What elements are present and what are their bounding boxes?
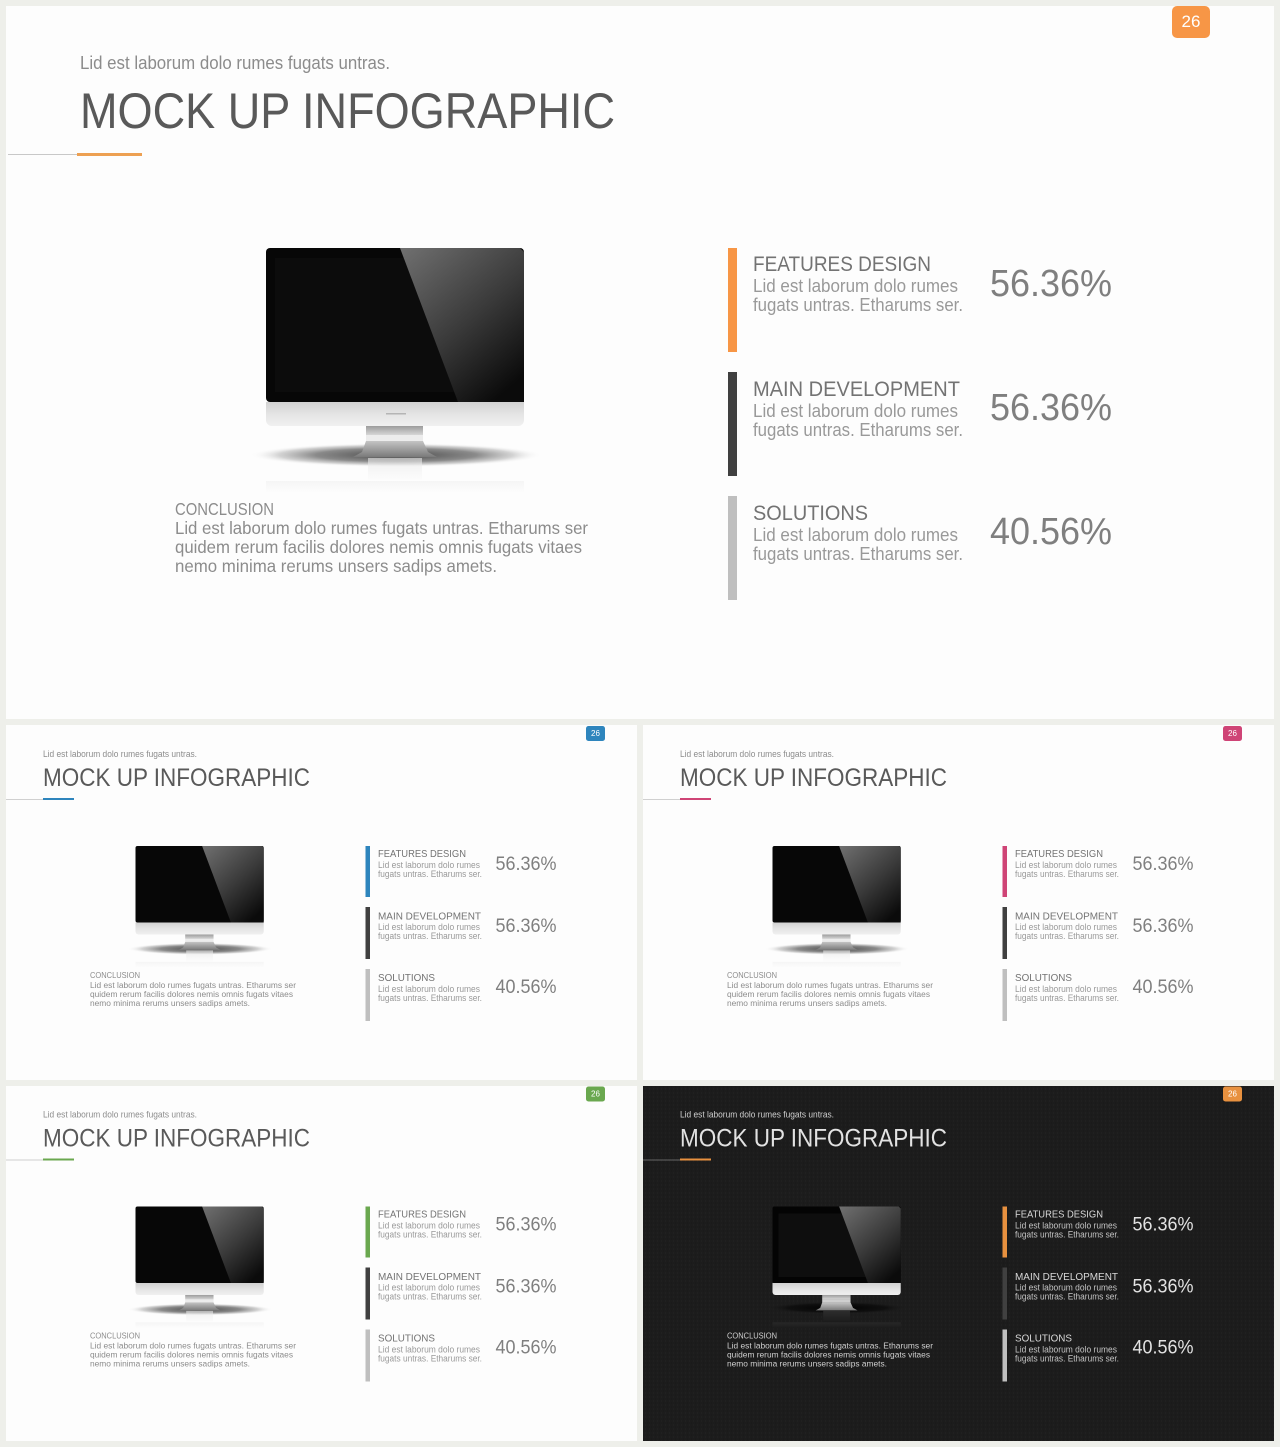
- title: MOCK UP INFOGRAPHIC: [680, 764, 947, 792]
- stat: solutions: SOLUTIONS: [753, 502, 868, 525]
- title underline: [6, 1158, 74, 1160]
- stat: main development: [366, 1268, 557, 1320]
- stat: solutions: [1002, 969, 1194, 1021]
- stat: solutions: Lid est laborum dolo rumes: [1015, 984, 1117, 994]
- stat: solutions: SOLUTIONS: [378, 1332, 435, 1344]
- stat: solutions: fugats untras. Etharums ser.: [753, 544, 963, 564]
- conclusion text block: nemo minima rerums unsers sadips amets.: [90, 1358, 250, 1368]
- stat: solutions: [366, 969, 557, 1021]
- stat: features design: FEATURES DESIGN: [1015, 848, 1103, 860]
- conclusion text block: nemo minima rerums unsers sadips amets.: [175, 556, 497, 576]
- title: MOCK UP INFOGRAPHIC: [80, 83, 615, 139]
- conclusion text block: quidem rerum facilis dolores nemis omnis fugats vitaes: [727, 1350, 931, 1360]
- subtitle: Lid est laborum dolo rumes fugats untras.: [43, 1110, 197, 1120]
- stat: features design: 56.36%: [496, 854, 557, 875]
- stat: main development: [728, 372, 1112, 476]
- stat: solutions: [1002, 1330, 1194, 1382]
- stat: features design: Lid est laborum dolo rumes: [1015, 860, 1117, 870]
- conclusion text block: [727, 970, 933, 1008]
- stat: features design: 56.36%: [1132, 854, 1194, 875]
- conclusion text block: CONCLUSION: [90, 1330, 140, 1340]
- stat: main development: MAIN DEVELOPMENT: [378, 1271, 482, 1283]
- stat: main development: 56.36%: [496, 1276, 557, 1298]
- stat: features design: 56.36%: [990, 263, 1112, 305]
- stat: features design: [1002, 846, 1194, 897]
- stat: solutions: Lid est laborum dolo rumes: [1015, 1344, 1117, 1354]
- stat: main development: 56.36%: [1132, 1276, 1194, 1298]
- conclusion text block: CONCLUSION: [175, 499, 274, 519]
- conclusion text block: nemo minima rerums unsers sadips amets.: [727, 998, 887, 1008]
- stat: main development: Lid est laborum dolo rumes: [1015, 922, 1117, 932]
- panel: small slide pink: [643, 725, 1274, 1080]
- subtitle: Lid est laborum dolo rumes fugats untras.: [80, 53, 390, 73]
- stat: features design: 56.36%: [1132, 1214, 1194, 1236]
- stat: main development: 56.36%: [496, 916, 557, 937]
- stat: solutions: fugats untras. Etharums ser.: [1015, 1354, 1119, 1364]
- icon: desktop monitor: [128, 846, 273, 967]
- stat: features design: FEATURES DESIGN: [378, 1208, 466, 1220]
- stat: features design: Lid est laborum dolo rumes: [1015, 1220, 1117, 1230]
- page badge: [586, 1086, 605, 1102]
- stat: features design: fugats untras. Etharums ser.: [378, 869, 482, 879]
- conclusion text block: [727, 1330, 933, 1368]
- stat: main development: Lid est laborum dolo rumes: [753, 401, 958, 421]
- stat: solutions: fugats untras. Etharums ser.: [378, 993, 482, 1003]
- stat: solutions: fugats untras. Etharums ser.: [1015, 993, 1119, 1003]
- conclusion text block: Lid est laborum dolo rumes fugats untras. Etharums ser: [90, 1340, 296, 1350]
- stat: main development: Lid est laborum dolo rumes: [378, 1282, 480, 1292]
- stat: main development: fugats untras. Etharums ser.: [1015, 931, 1119, 941]
- conclusion text block: quidem rerum facilis dolores nemis omnis fugats vitaes: [727, 989, 931, 999]
- conclusion text block: Lid est laborum dolo rumes fugats untras. Etharums ser: [175, 518, 588, 538]
- conclusion text block: Lid est laborum dolo rumes fugats untras. Etharums ser: [727, 1340, 933, 1350]
- stat: features design: FEATURES DESIGN: [1015, 1208, 1103, 1220]
- stat: main development: fugats untras. Etharums ser.: [378, 1292, 482, 1302]
- stat: solutions: SOLUTIONS: [1015, 972, 1072, 984]
- conclusion text block: CONCLUSION: [727, 1330, 777, 1340]
- stat: features design: Lid est laborum dolo rumes: [378, 1220, 480, 1230]
- conclusion text block: CONCLUSION: [90, 970, 140, 980]
- stat: features design: [728, 248, 1112, 352]
- panel: small slide green: [6, 1086, 637, 1441]
- stat: solutions: Lid est laborum dolo rumes: [378, 1344, 480, 1354]
- page badge: 26: [1182, 12, 1200, 31]
- stat: solutions: SOLUTIONS: [1015, 1332, 1072, 1344]
- conclusion text block: Lid est laborum dolo rumes fugats untras. Etharums ser: [90, 980, 296, 990]
- conclusion text block: [90, 970, 296, 1008]
- conclusion text block: quidem rerum facilis dolores nemis omnis fugats vitaes: [90, 1350, 294, 1360]
- subtitle: Lid est laborum dolo rumes fugats untras.: [680, 749, 834, 759]
- title: MOCK UP INFOGRAPHIC: [43, 764, 310, 792]
- stat: main development: fugats untras. Etharums ser.: [1015, 1292, 1119, 1302]
- page badge: [586, 726, 605, 741]
- stat: features design: FEATURES DESIGN: [753, 253, 931, 276]
- stat: main development: fugats untras. Etharums ser.: [753, 420, 963, 440]
- conclusion text block: CONCLUSION: [727, 970, 777, 980]
- page badge: 26: [591, 729, 600, 738]
- stat: main development: [1002, 1268, 1194, 1320]
- stat: main development: fugats untras. Etharums ser.: [378, 931, 482, 941]
- stat: solutions: fugats untras. Etharums ser.: [378, 1354, 482, 1364]
- conclusion text block: nemo minima rerums unsers sadips amets.: [90, 998, 250, 1008]
- stat: features design: [366, 846, 557, 897]
- stat: main development: 56.36%: [1132, 916, 1194, 937]
- stat: solutions: Lid est laborum dolo rumes: [753, 525, 958, 545]
- stat: features design: fugats untras. Etharums ser.: [753, 295, 963, 315]
- stat: features design: [1002, 1206, 1194, 1258]
- title underline: [643, 1158, 711, 1160]
- title: MOCK UP INFOGRAPHIC: [680, 1124, 947, 1152]
- title underline: [6, 798, 74, 800]
- title underline: [643, 798, 711, 800]
- panel: small slide blue: [6, 725, 637, 1080]
- stat: main development: Lid est laborum dolo rumes: [378, 922, 480, 932]
- stat: solutions: SOLUTIONS: [378, 972, 435, 984]
- stat: main development: [366, 907, 557, 959]
- stat: solutions: Lid est laborum dolo rumes: [378, 984, 480, 994]
- stat: features design: Lid est laborum dolo rumes: [753, 276, 958, 296]
- page badge: [1223, 726, 1242, 741]
- page badge: [1172, 6, 1210, 38]
- page badge: 26: [591, 1090, 600, 1098]
- page badge: 26: [1228, 729, 1237, 738]
- stat: solutions: 40.56%: [990, 511, 1112, 553]
- stat: features design: 56.36%: [496, 1214, 557, 1236]
- stat: solutions: 40.56%: [1132, 1338, 1194, 1358]
- stat: features design: [366, 1206, 557, 1258]
- conclusion text block: [175, 499, 588, 576]
- stat: features design: fugats untras. Etharums ser.: [378, 1230, 482, 1240]
- stat: main development: 56.36%: [990, 387, 1112, 429]
- page badge: 26: [1228, 1090, 1237, 1098]
- panel: small slide dark: [643, 1086, 1274, 1441]
- stat: main development: MAIN DEVELOPMENT: [753, 378, 960, 401]
- subtitle: Lid est laborum dolo rumes fugats untras.: [680, 1110, 834, 1120]
- icon: desktop monitor: [250, 248, 542, 492]
- icon: desktop monitor: [765, 846, 910, 967]
- stat: features design: fugats untras. Etharums ser.: [1015, 869, 1119, 879]
- stat: main development: MAIN DEVELOPMENT: [378, 910, 482, 922]
- stat: features design: Lid est laborum dolo rumes: [378, 860, 480, 870]
- stat: solutions: 40.56%: [1132, 977, 1194, 998]
- panel: large slide orange: [6, 6, 1274, 719]
- title underline: [8, 153, 142, 156]
- page badge: [1223, 1086, 1242, 1102]
- stat: solutions: [728, 496, 1112, 600]
- stat: main development: MAIN DEVELOPMENT: [1015, 1271, 1119, 1283]
- subtitle: Lid est laborum dolo rumes fugats untras.: [43, 749, 197, 759]
- stat: features design: FEATURES DESIGN: [378, 848, 466, 860]
- conclusion text block: quidem rerum facilis dolores nemis omnis fugats vitaes: [175, 537, 582, 557]
- conclusion text block: Lid est laborum dolo rumes fugats untras. Etharums ser: [727, 980, 933, 990]
- stat: main development: Lid est laborum dolo rumes: [1015, 1282, 1117, 1292]
- icon: desktop monitor: [768, 1206, 907, 1328]
- conclusion text block: nemo minima rerums unsers sadips amets.: [727, 1358, 887, 1368]
- conclusion text block: quidem rerum facilis dolores nemis omnis fugats vitaes: [90, 989, 294, 999]
- stat: features design: fugats untras. Etharums ser.: [1015, 1230, 1119, 1240]
- stat: solutions: 40.56%: [496, 1338, 557, 1358]
- stat: main development: [1002, 907, 1194, 959]
- stat: solutions: [366, 1330, 557, 1382]
- icon: desktop monitor: [128, 1206, 273, 1328]
- stat: solutions: 40.56%: [496, 977, 557, 998]
- stat: main development: MAIN DEVELOPMENT: [1015, 910, 1119, 922]
- title: MOCK UP INFOGRAPHIC: [43, 1124, 310, 1152]
- conclusion text block: [90, 1330, 296, 1368]
